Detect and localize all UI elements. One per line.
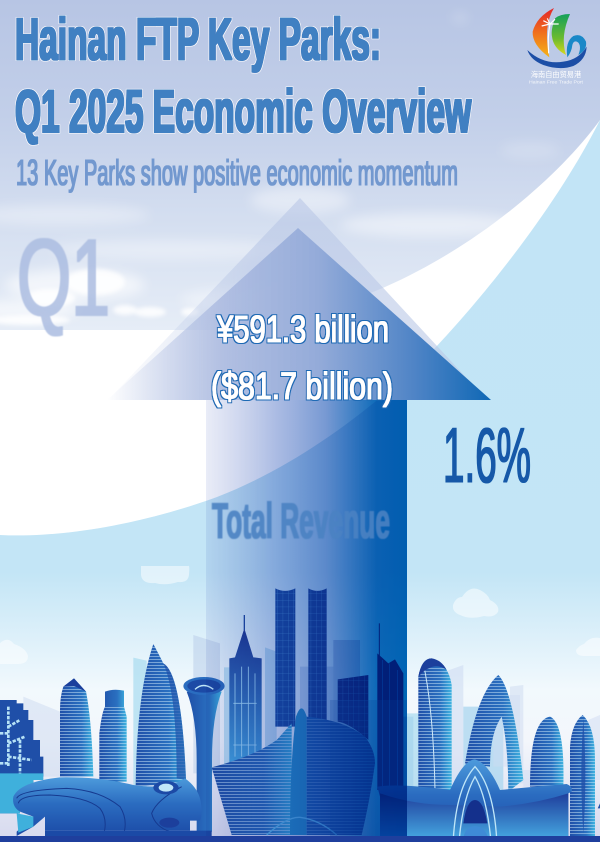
distant edge figure [598,803,600,808]
revenue value: ¥591.3 billion [216,309,389,351]
Q1 watermark: Q1 [17,217,110,339]
revenue value: ($81.7 billion) [211,366,393,408]
sky photo panel with clouds [0,0,600,330]
twin tower left [275,588,295,740]
total revenue label: Total Revenue [212,493,390,549]
shell building right [267,717,375,835]
logo: Hainan Free Trade Port [527,8,587,84]
twin tower right [308,588,327,723]
left skyline (tree, towers, museum) [0,588,295,837]
logo palm [542,18,559,53]
arrow: pale outer head [108,198,487,400]
narrow oval tower [570,715,595,838]
opera house [377,759,572,838]
logo swoosh base [527,47,587,68]
logo Chinese name: 海南自由贸易港 [531,70,582,79]
spire slab tower [377,623,403,790]
title [15,6,471,145]
logo right sail [552,14,570,55]
square grid block [338,675,368,740]
sail tower [136,644,186,787]
stepped cylinder tower [99,690,127,782]
pixel tree [0,700,43,813]
white swoosh curve [0,100,600,535]
arrow: gradient shaft behind text [206,400,407,836]
observation tower [183,677,225,832]
curved tower [418,658,452,790]
logo left sail [533,8,554,57]
shell building left [212,723,292,835]
central leaf building [290,708,307,835]
ground strip [0,836,600,842]
arrow: shaft tint over lower skyline [330,700,407,836]
clouds [0,566,600,664]
right skyline (towers, arches, opera) [267,588,600,838]
back pale buildings [23,635,600,833]
logo spiral wave [567,35,586,57]
museum [13,777,212,837]
arch tower [465,675,523,792]
cityscape [0,566,600,842]
revenue value [211,309,393,408]
arrow: gradient head [107,228,491,400]
spire tower [229,615,262,764]
tower with rounded crown [60,678,93,777]
dome tower [530,717,563,787]
logo English name: Hainan Free Trade Port [529,80,584,84]
